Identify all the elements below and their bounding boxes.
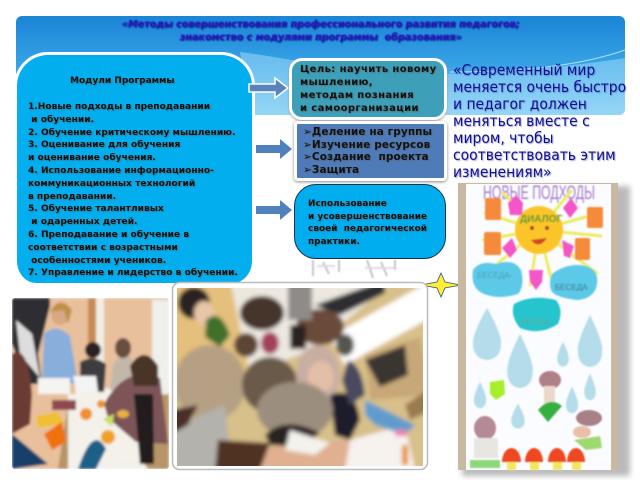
panel: stages list (294, 121, 447, 181)
header band (16, 16, 625, 115)
cloud: debate (472, 262, 522, 297)
arrow: modules to stages (256, 139, 292, 159)
module heading: Модули Программы (70, 76, 175, 86)
arrow: modules to goal (248, 76, 289, 100)
practice text: Использование и усовершенствование своей педагогической практики. (308, 199, 427, 247)
panel: goal (289, 58, 447, 120)
drops (473, 308, 501, 360)
stages list text: ➢Деление на группы ➢Изучение ресурсов ➢Создание проекта ➢Защита (303, 126, 432, 176)
module list: 1.Новые подходы в преподавании и обучении. 2. Обучение критическому мышлению. 3. Оценивание для обучения и оценивание обучения. 4. Использование информационно- коммуникационных технологий в преподавании. 5. Обучение талантливых и одаренных детей. 6. Преподавание и обучение в соответствии с возрастными особенностями учеников. 7. Управление и лидерство в обучении. (28, 102, 238, 278)
cloud: communicative (550, 265, 597, 300)
photo: left group of teachers (12, 298, 169, 469)
mushrooms (539, 371, 561, 389)
goal text: Цель: научить новому мышлению, методам познания и самоорганизации (300, 64, 437, 114)
title: «Методы совершенствования профессионального развития педагогов; знакомство с модулями программы образования» (122, 19, 519, 43)
photo: middle group of teachers (172, 282, 428, 470)
cloud: exploratory (513, 298, 561, 331)
panel: modules of the programme (14, 52, 255, 283)
poster: new approaches: БЕСЕДА- (477, 271, 512, 280)
arrow: modules to practice (256, 200, 292, 220)
sun (515, 206, 563, 254)
panel: practice (294, 184, 446, 259)
quote: «Современный мир меняется очень быстро и педагог должен меняться вместе с миром, чтобы соответствовать этим изменениям» (453, 61, 626, 181)
sun label: ДИАЛОГ (520, 214, 562, 225)
star (426, 272, 458, 298)
poster: new approaches (458, 182, 634, 480)
poster: new approaches: БЕСЕДА (555, 283, 588, 292)
faint sketch behind panel (311, 259, 397, 279)
poster: new approaches: БЕСЕДА (521, 319, 550, 326)
